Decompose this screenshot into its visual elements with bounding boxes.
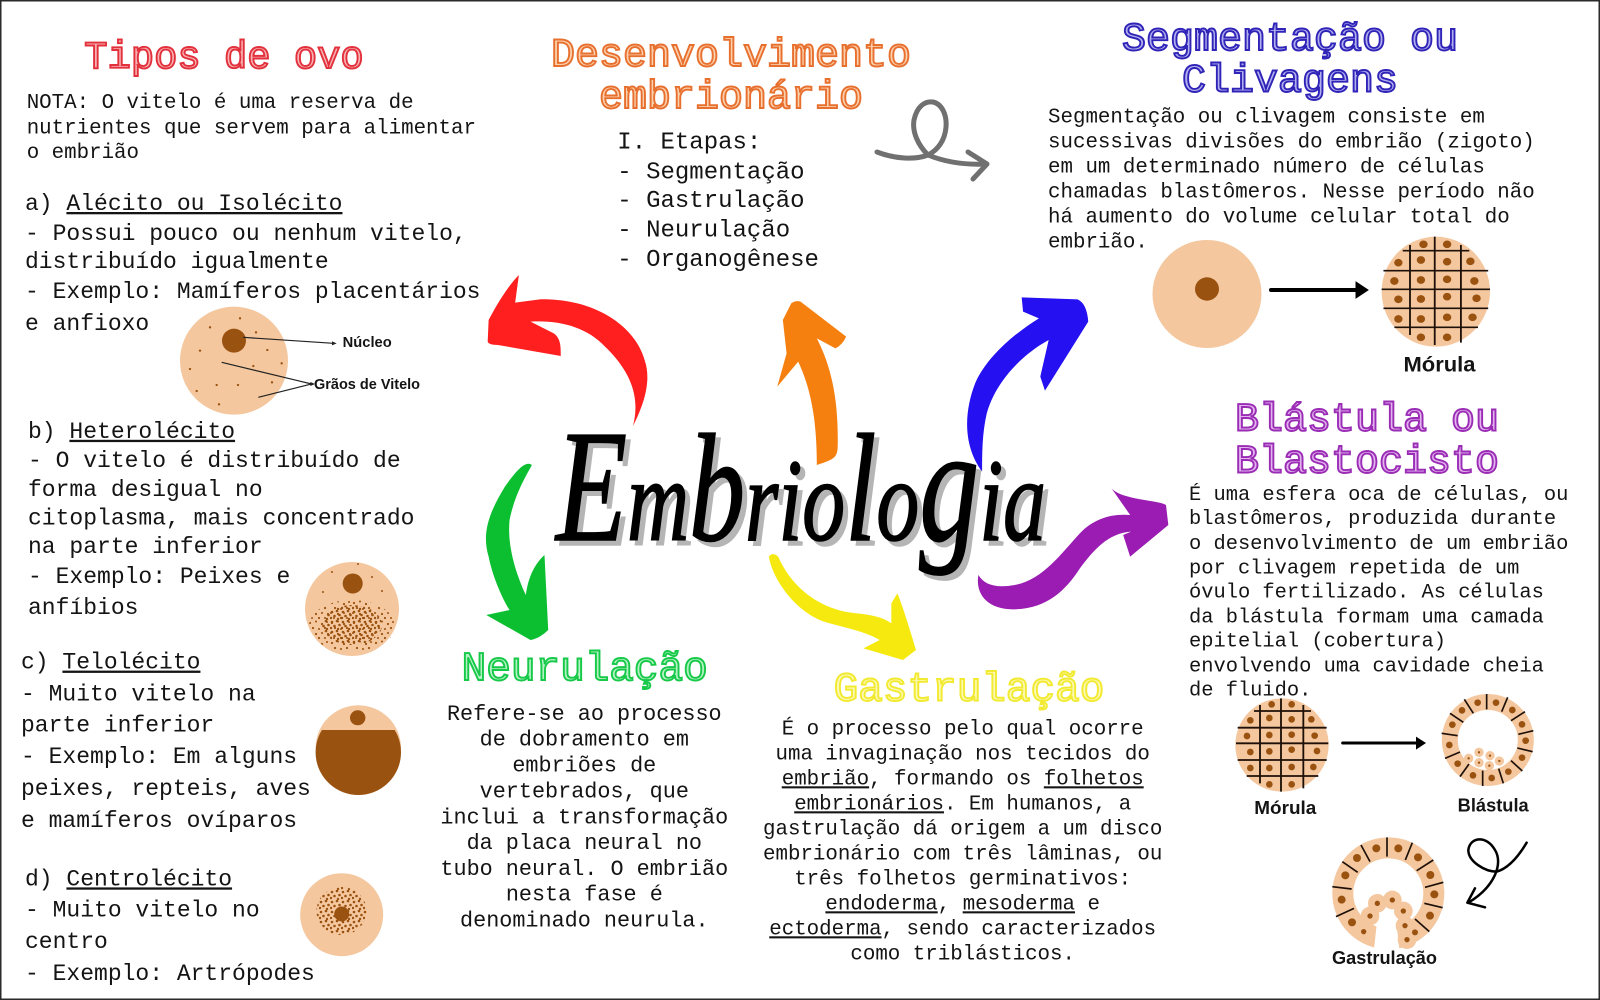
list: etapas: - Segmentação xyxy=(617,159,805,186)
label: mórula pequena: Mórula xyxy=(1254,798,1317,818)
text block: alécito: e anfioxo xyxy=(25,311,149,337)
text block: blástula: o desenvolvimento de um embrião xyxy=(1189,533,1568,556)
arrow: blástula para gastrulação xyxy=(1467,839,1527,907)
text block: alécito: a) Alécito ou Isolécito xyxy=(25,191,342,217)
text block: segmentação: em um determinado número de células xyxy=(1048,157,1485,180)
heading: blástula ou blastocisto: Blástula ou xyxy=(1235,399,1499,444)
arrow: zigoto para mórula xyxy=(1271,282,1368,298)
text block: heterolécito: - Exemplo: Peixes e xyxy=(28,564,290,590)
panel: blástula ou blastocisto xyxy=(1189,399,1568,968)
text block: heterolécito: forma desigual no xyxy=(28,477,263,503)
text block: segmentação: sucessivas divisões do embrião (zigoto) xyxy=(1048,132,1535,155)
text block: nota: o embrião xyxy=(27,142,139,165)
list: etapas: - Organogênese xyxy=(617,247,819,274)
text block: nota xyxy=(27,92,476,165)
text block: nota: NOTA: O vitelo é uma reserva de xyxy=(27,92,414,115)
heading: desenvolvimento embrionário: Desenvolvimento xyxy=(551,34,911,79)
text block: centrolécito: - Exemplo: Artrópodes xyxy=(25,961,315,987)
text block: blástula: epitelial (cobertura) xyxy=(1189,631,1446,654)
text block: alécito: - Exemplo: Mamíferos placentários xyxy=(25,279,480,305)
text block: blástula: da blástula formam uma camada xyxy=(1189,606,1544,629)
text block: segmentação: chamadas blastômeros. Nesse período não xyxy=(1048,182,1535,205)
text block: neurulação: vertebrados, que xyxy=(480,779,689,804)
text block: neurulação: tubo neural. O embrião xyxy=(440,857,728,882)
text block: gastrulação: É o processo pelo qual ocorre xyxy=(782,717,1144,741)
heading: neurulação: Neurulação xyxy=(462,647,708,693)
icon: ovo centrolécito xyxy=(300,873,383,956)
heading: blástula ou blastocisto: Blastocisto xyxy=(1235,441,1499,486)
icon: ovo telolécito xyxy=(316,705,401,795)
text block: gastrulação: embrionários. Em humanos, a xyxy=(794,793,1131,816)
text block: blástula: de fluido. xyxy=(1189,680,1311,703)
text block: neurulação: da placa neural no xyxy=(467,831,702,856)
title: embriologia: Embriologia xyxy=(555,393,1046,576)
text block: blástula: envolvendo uma cavidade cheia xyxy=(1189,656,1544,679)
icon: zigoto xyxy=(1152,240,1262,348)
text block: gastrulação: ectoderma, sendo caracterizados xyxy=(769,918,1156,941)
panel: gastrulação xyxy=(763,668,1162,966)
text block: neurulação: embriões de xyxy=(512,754,656,779)
text block: neurulação xyxy=(440,702,728,934)
text block: heterolécito: b) Heterolécito xyxy=(28,419,235,445)
text block: heterolécito: citoplasma, mais concentrado xyxy=(28,506,414,532)
text block: segmentação: Segmentação ou clivagem consiste em xyxy=(1048,107,1485,130)
text block: centrolécito: - Muito vitelo no xyxy=(25,898,260,924)
text block: neurulação: inclui a transformação xyxy=(440,805,728,830)
icon: mórula xyxy=(1382,237,1490,347)
text block: gastrulação: endoderma, mesoderma e xyxy=(825,893,1100,916)
text block: blástula: óvulo fertilizado. As células xyxy=(1189,581,1544,604)
text block: blástula: blastômeros, produzida durante xyxy=(1189,508,1556,531)
icon: mórula pequena xyxy=(1235,698,1329,792)
text block: telolécito xyxy=(21,650,311,834)
text block: telolécito: e mamíferos ovíparos xyxy=(21,808,297,834)
list: etapas: - Gastrulação xyxy=(617,188,805,215)
text block: centrolécito: d) Centrolécito xyxy=(25,866,232,892)
text block: neurulação: Refere-se ao processo xyxy=(447,702,722,727)
label: gastrulação: Gastrulação xyxy=(1332,948,1437,968)
text block: telolécito: parte inferior xyxy=(21,712,214,738)
heading: desenvolvimento embrionário xyxy=(551,34,911,121)
icon: ovo alécito xyxy=(180,307,337,415)
text block: telolécito: - Muito vitelo na xyxy=(21,681,256,707)
list: etapas xyxy=(617,129,819,274)
text block: blástula xyxy=(1189,483,1568,703)
text block: segmentação: há aumento do volume celular total do xyxy=(1048,207,1510,230)
panel: neurulação xyxy=(440,647,728,934)
arrow: orange xyxy=(777,301,846,465)
text block: heterolécito xyxy=(28,419,414,621)
arrow: blue xyxy=(967,297,1088,472)
text block: nota: nutrientes que servem para alimentar xyxy=(27,118,476,140)
arrow: purple xyxy=(978,488,1168,609)
label: blástula: Blástula xyxy=(1458,796,1530,816)
arrows: colored arrows around center xyxy=(486,275,1168,660)
heading: tipos de ovo: Tipos de ovo xyxy=(84,36,364,80)
heading: segmentação ou clivagens: Clivagens xyxy=(1182,60,1398,105)
heading: blástula ou blastocisto xyxy=(1235,399,1499,486)
text block: centrolécito xyxy=(25,866,315,987)
heading: segmentação ou clivagens xyxy=(1122,18,1458,105)
label: mórula: Mórula xyxy=(1404,354,1476,377)
text block: gastrulação: três folhetos germinativos: xyxy=(794,868,1131,891)
arrow: gray squiggle xyxy=(877,102,987,179)
icon: blástula xyxy=(1442,694,1533,786)
text block: centrolécito: centro xyxy=(25,929,108,955)
arrow: mórula para blástula xyxy=(1343,737,1426,750)
text block: gastrulação: embrionário com três lâminas, ou xyxy=(763,843,1162,866)
label: grãos de vitelo: Grãos de Vitelo xyxy=(314,377,420,393)
text block: alécito: distribuído igualmente xyxy=(25,249,329,275)
text block: segmentação: embrião. xyxy=(1048,232,1148,255)
text block: gastrulação: embrião, formando os folhetos xyxy=(782,768,1144,791)
list: etapas: I. Etapas: xyxy=(617,129,761,156)
heading: desenvolvimento embrionário: embrionário xyxy=(599,76,863,121)
icon: gastrulação xyxy=(1332,837,1443,955)
text block: heterolécito: anfíbios xyxy=(28,595,138,621)
label: núcleo: Núcleo xyxy=(343,335,392,351)
text block: segmentação xyxy=(1048,107,1535,255)
arrow: yellow xyxy=(769,554,916,660)
heading: segmentação ou clivagens: Segmentação ou xyxy=(1122,18,1458,63)
arrow: red xyxy=(488,275,647,426)
text block: telolécito: c) Telolécito xyxy=(21,650,200,676)
list: etapas: - Neurulação xyxy=(617,218,790,245)
text block: neurulação: denominado neurula. xyxy=(460,909,709,934)
text block: gastrulação: como triblásticos. xyxy=(850,943,1075,966)
text block: telolécito: - Exemplo: Em alguns xyxy=(21,744,297,770)
text block: telolécito: peixes, repteis, aves xyxy=(21,776,311,802)
text block: blástula: É uma esfera oca de células, ou xyxy=(1189,483,1568,507)
text block: blástula: por clivagem repetida de um xyxy=(1189,557,1519,580)
text block: alécito: - Possui pouco ou nenhum vitelo, xyxy=(25,221,467,247)
diagram: mórula blástula gastrulação xyxy=(1235,694,1533,955)
icon: ovo heterolécito xyxy=(305,562,399,656)
heading: gastrulação: Gastrulação xyxy=(834,668,1104,714)
text block: gastrulação: uma invaginação nos tecidos do xyxy=(775,743,1150,766)
text block: alécito xyxy=(25,191,480,337)
text block: neurulação: nesta fase é xyxy=(506,883,663,908)
text block: gastrulação: gastrulação dá origem a um disco xyxy=(763,818,1162,841)
text block: heterolécito: - O vitelo é distribuído de xyxy=(28,448,401,474)
text block: gastrulação xyxy=(763,717,1162,966)
text block: heterolécito: na parte inferior xyxy=(28,534,263,560)
panel: segmentação ou clivagens xyxy=(1048,18,1535,377)
panel: desenvolvimento embrionário xyxy=(551,34,987,274)
arrow: green xyxy=(486,464,548,640)
text block: neurulação: de dobramento em xyxy=(480,728,689,753)
panel: tipos de ovo xyxy=(21,36,480,987)
